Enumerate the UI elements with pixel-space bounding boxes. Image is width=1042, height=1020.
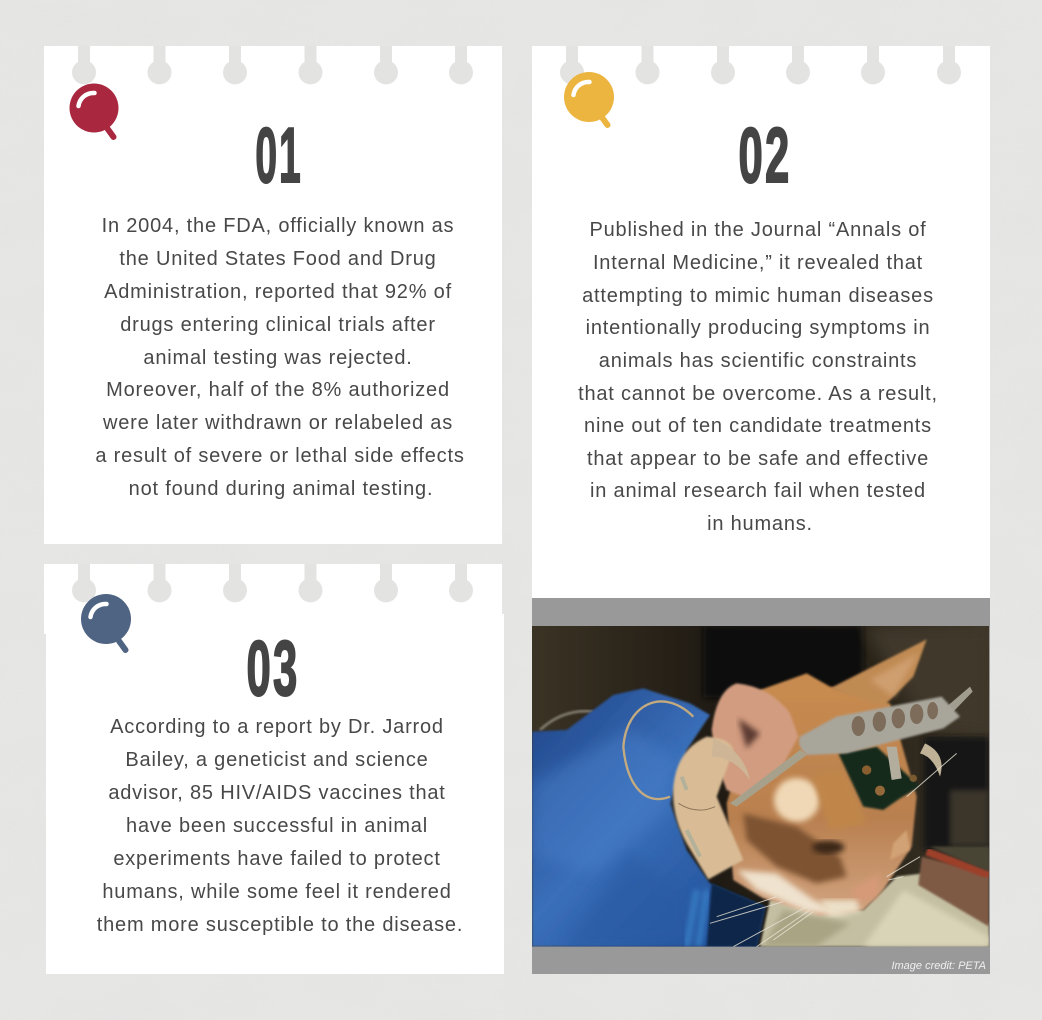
text block 02: in animal research fail when tested [590,480,926,502]
icon: yellow magnifier [564,72,614,125]
note sheet 02 [532,46,990,598]
text block 02: attempting to mimic human diseases [582,285,934,307]
text block 02 [578,219,938,535]
icon: blue magnifier [81,594,131,650]
panel: note 01 [44,46,502,544]
text block 01: Moreover, half of the 8% authorized [106,379,450,401]
number 01: 01 [255,112,303,200]
text block 03: Bailey, a geneticist and science [125,749,429,771]
binder holes 03 [72,564,473,602]
cat head [727,673,917,916]
text block 01: animal testing was rejected. [143,347,413,369]
image credit: Image credit: PETA [891,960,986,972]
text block 02: animals has scientific constraints [599,350,917,372]
text block 01 [95,215,465,500]
text block 02: intentionally producing symptoms in [586,317,930,339]
note sheet 03 [44,564,504,974]
note sheet 01 [44,46,502,544]
red box [918,857,989,927]
text block 03 [97,716,463,936]
text block 01: a result of severe or lethal side effects [95,445,465,467]
text block 02: in humans. [707,513,813,535]
binder holes 02 [560,46,961,84]
panel: photo with credit [532,598,990,974]
number 02: 02 [738,113,792,199]
head shading [774,778,819,822]
text block 02: nine out of ten candidate treatments [584,415,932,437]
right ear [830,639,927,707]
whiskers [710,753,957,947]
text block 02: Published in the Journal “Annals of [589,219,927,241]
text block 01: the United States Food and Drug [119,248,437,270]
text block 01: were later withdrawn or relabeled as [102,412,453,434]
text block 03: humans, while some feel it rendered [102,881,452,903]
number 03: 03 [246,626,300,712]
panel: note 03 [44,564,504,974]
metal rods [730,750,807,807]
metal bar [799,697,960,755]
text block 03: advisor, 85 HIV/AIDS vaccines that [108,782,446,804]
blue cloth [532,688,765,947]
left ear [712,683,798,797]
binder holes 01 [72,46,473,84]
text block 03: them more susceptible to the disease. [97,914,463,936]
icon: red magnifier [70,84,118,137]
photo: cat with implant [532,626,989,947]
text block 01: drugs entering clinical trials after [120,314,436,336]
panel: note 02 [532,46,990,598]
text block 03: experiments have failed to protect [113,848,441,870]
hearing aid [623,701,693,799]
text block 01: not found during animal testing. [129,478,433,500]
implant base [838,747,920,810]
text block 03: have been successful in animal [126,815,428,837]
text block 01: Administration, reported that 92% of [104,281,452,303]
table [760,873,989,947]
text block 02: that cannot be overcome. As a result, [578,383,938,405]
text block 03: According to a report by Dr. Jarrod [110,716,444,738]
text block 01: In 2004, the FDA, officially known as [102,215,454,237]
grey photo frame [532,598,990,974]
text block 02: that appear to be safe and effective [587,448,929,470]
text block 02: Internal Medicine,” it revealed that [593,252,923,274]
